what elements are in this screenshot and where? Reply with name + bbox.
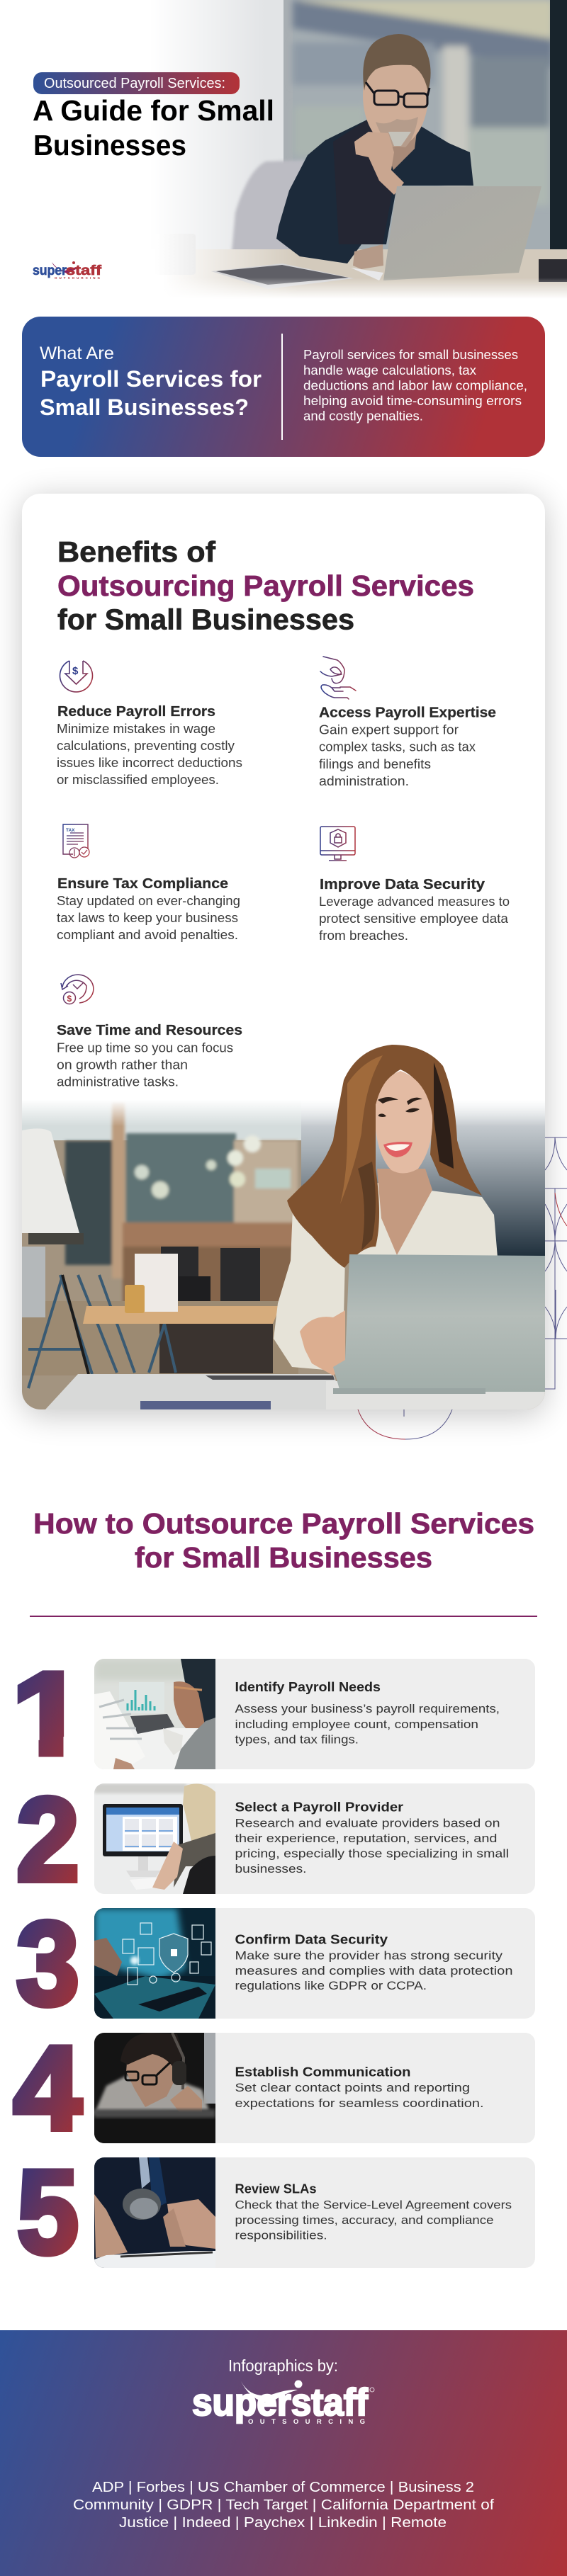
benefit: improve data security [319, 877, 510, 943]
icon: reduce errors: $ [72, 665, 79, 677]
benefit: access payroll expertise: administration. [319, 774, 409, 788]
photo: data security [94, 1908, 215, 2019]
logo: superstaff header: staff [66, 263, 102, 278]
number 2: 2 [16, 1773, 79, 1906]
heading: how to outsource: How to Outsource Payroll Services [33, 1507, 534, 1540]
benefit: reduce payroll errors: Minimize mistakes in wage [57, 722, 215, 736]
step 2 text: businesses. [235, 1863, 306, 1876]
benefit: save time and resources: Free up time so you can focus [57, 1041, 233, 1055]
logo: superstaff header: super [33, 263, 67, 278]
heading: benefits [57, 535, 474, 636]
title: Businesses [33, 129, 186, 161]
man body [276, 119, 473, 263]
icon: access expertise [320, 657, 356, 699]
title pill [33, 72, 240, 94]
step 4 [13, 2021, 535, 2155]
step 2 text [235, 1800, 509, 1876]
benefit: ensure tax compliance: tax laws to keep your business [57, 911, 238, 925]
number 1: 1 [11, 1647, 85, 1781]
step 4 text: Set clear contact points and reporting [235, 2082, 470, 2094]
decorative arc below card [358, 1409, 452, 1439]
lamp [22, 1128, 79, 1233]
blouse [274, 1181, 498, 1371]
hand [300, 1310, 345, 1375]
benefit: access payroll expertise [319, 705, 496, 788]
step 1 [0, 1647, 535, 1781]
hand on laptop [353, 244, 383, 269]
logo: superstaff header [33, 261, 102, 280]
step 1 text: including employee count, compensation [235, 1718, 478, 1731]
benefit: reduce payroll errors [57, 704, 242, 787]
white fade over photo [22, 1091, 545, 1126]
panel: benefits [22, 494, 545, 1409]
definition text: Payroll services for small businesses [303, 348, 518, 362]
floor [22, 1301, 298, 1375]
heading: what are [40, 344, 262, 420]
photo: woman at laptop [22, 1091, 545, 1409]
logo: superstaff footer: OUTSOURCING [248, 2418, 365, 2426]
panel shadow [22, 498, 545, 1415]
benefit: reduce payroll errors: calculations, preventing costly [57, 739, 235, 753]
infographics by: Infographics by: [228, 2356, 338, 2375]
chair [232, 160, 305, 252]
window pillar [550, 0, 567, 268]
icon: save time: $ [67, 994, 72, 1004]
benefit: access payroll expertise: Access Payroll Expertise [319, 705, 496, 721]
glasses [366, 82, 430, 107]
photo: magnifying glass [94, 2157, 215, 2268]
step 3 text: Confirm Data Security [235, 1933, 388, 1947]
step 4 text: Establish Communication [235, 2065, 411, 2079]
benefit: ensure tax compliance: Ensure Tax Compliance [57, 876, 228, 892]
step 5 text: Check that the Service-Level Agreement covers [235, 2198, 512, 2211]
title [33, 94, 274, 161]
benefit: improve data security: Leverage advanced measures to [319, 895, 510, 909]
step 2 text: pricing, especially those specializing in small [235, 1848, 509, 1861]
definition text: handle wage calculations, tax [303, 363, 476, 378]
smile [383, 1142, 412, 1157]
number 3: 3 [16, 1897, 79, 2030]
bottom fade [180, 278, 567, 299]
heading: benefits: for Small Businesses [57, 603, 354, 636]
definition text: and costly penalties. [303, 409, 423, 424]
benefit: improve data security: Improve Data Security [320, 877, 485, 892]
title: A Guide for Small [33, 94, 274, 127]
laptop [333, 1254, 545, 1392]
icon: tax document: TAX [66, 828, 75, 833]
number 4: 4 [13, 2021, 82, 2155]
man hand at chin [354, 132, 404, 195]
decorative lines right of benefits card [545, 1137, 567, 1389]
step 2 [16, 1773, 535, 1906]
sources: Community | GDPR | Tech Target | California Department of [73, 2497, 494, 2513]
benefit: ensure tax compliance: Stay updated on ever-changing [57, 894, 240, 908]
heading: how to outsource: for Small Businesses [135, 1541, 432, 1574]
dark backdrop right [301, 1091, 545, 1257]
logo: superstaff footer: superstaff [192, 2381, 369, 2424]
icon: tax document [63, 824, 89, 858]
benefit: improve data security: protect sensitive employee data [319, 912, 509, 926]
benefit: save time and resources: Save Time and Resources [57, 1023, 242, 1038]
step 4 text [235, 2065, 483, 2110]
definition text [303, 348, 527, 424]
step 5 text: processing times, accuracy, and compliance [235, 2214, 493, 2227]
table top [201, 249, 567, 296]
benefit: reduce payroll errors: or misclassified employees. [57, 773, 219, 787]
step 4 text: expectations for seamless coordination. [235, 2097, 483, 2110]
heading: benefits: Benefits of [57, 535, 215, 568]
footer [0, 2330, 567, 2576]
stool legs [28, 1275, 176, 1388]
benefit: access payroll expertise: filings and benefits [319, 757, 431, 771]
front desk [45, 1374, 347, 1409]
number 5: 5 [17, 2145, 79, 2279]
photo: payroll software [94, 1783, 215, 1894]
icon: monitor security [320, 827, 355, 861]
mug [155, 234, 196, 275]
step 1 text: Identify Payroll Needs [235, 1680, 381, 1694]
photo: reviewing payroll [94, 1659, 215, 1769]
benefit: save time and resources: on growth rather than [57, 1058, 188, 1072]
step 5 [17, 2145, 535, 2279]
benefit: reduce payroll errors: issues like incorrect deductions [57, 756, 242, 770]
step 3 text [235, 1933, 513, 1992]
step 1 text: Assess your business’s payroll requirements, [235, 1703, 500, 1715]
face [376, 1071, 432, 1174]
benefit: improve data security: from breaches. [319, 929, 408, 943]
step 3 text: measures and complies with data protection [235, 1965, 513, 1978]
heading: how to outsource [33, 1507, 534, 1574]
man head [363, 65, 428, 147]
benefit: access payroll expertise: Gain expert support for [319, 723, 459, 737]
benefit: save time and resources [57, 1023, 242, 1089]
left fade [142, 0, 232, 249]
hero photo: man at laptop [174, 0, 567, 296]
title pill: Outsourced Payroll Services: [44, 76, 225, 91]
laptop [383, 186, 541, 280]
definition text: deductions and labor law compliance, [303, 378, 527, 392]
neck [392, 135, 417, 170]
woman figure [274, 1045, 545, 1394]
heading: benefits: Outsourcing Payroll Services [57, 569, 474, 602]
hair [287, 1045, 482, 1268]
step 2 text: Select a Payroll Provider [235, 1800, 403, 1815]
benefit: ensure tax compliance: compliant and avoid penalties. [57, 928, 238, 942]
heading: what are: Small Businesses? [40, 395, 249, 420]
sources: ADP | Forbes | US Chamber of Commerce | Business 2 [92, 2479, 474, 2495]
heading: what are: Payroll Services for [40, 366, 262, 392]
panel: what are payroll services [22, 317, 545, 457]
step 2 text: their experience, reputation, services, and [235, 1832, 498, 1845]
skin chest [377, 1169, 432, 1255]
icon: save time [61, 975, 94, 1004]
tablet [211, 263, 354, 289]
sources: Justice | Indeed | Paychex | Linkedin | Remote [119, 2514, 447, 2531]
benefit: access payroll expertise: complex tasks, such as tax [319, 740, 476, 754]
benefit: reduce payroll errors: Reduce Payroll Errors [57, 704, 215, 720]
step 5 text: Review SLAs [235, 2181, 316, 2196]
photo: headset agent [94, 2033, 215, 2143]
definition text: helping avoid time-consuming errors [303, 394, 522, 408]
step 3 [16, 1897, 535, 2030]
benefit: save time and resources: administrative tasks. [57, 1075, 179, 1089]
step 1 text: types, and tax filings. [235, 1734, 359, 1747]
step 3 text: Make sure the provider has strong security [235, 1949, 503, 1962]
benefit: ensure tax compliance [57, 876, 240, 942]
step 5 text [235, 2181, 512, 2242]
heading: what are: What Are [40, 344, 114, 363]
table [83, 1306, 280, 1324]
sources [73, 2479, 494, 2531]
step 3 text: regulations like GDPR or CCPA. [235, 1980, 427, 1992]
icon: reduce errors [60, 661, 93, 692]
step 1 text [235, 1680, 500, 1747]
step 2 text: Research and evaluate providers based on [235, 1817, 500, 1829]
logo: superstaff header: OUTSOURCING [55, 276, 100, 280]
step 5 text: responsibilities. [235, 2229, 327, 2242]
